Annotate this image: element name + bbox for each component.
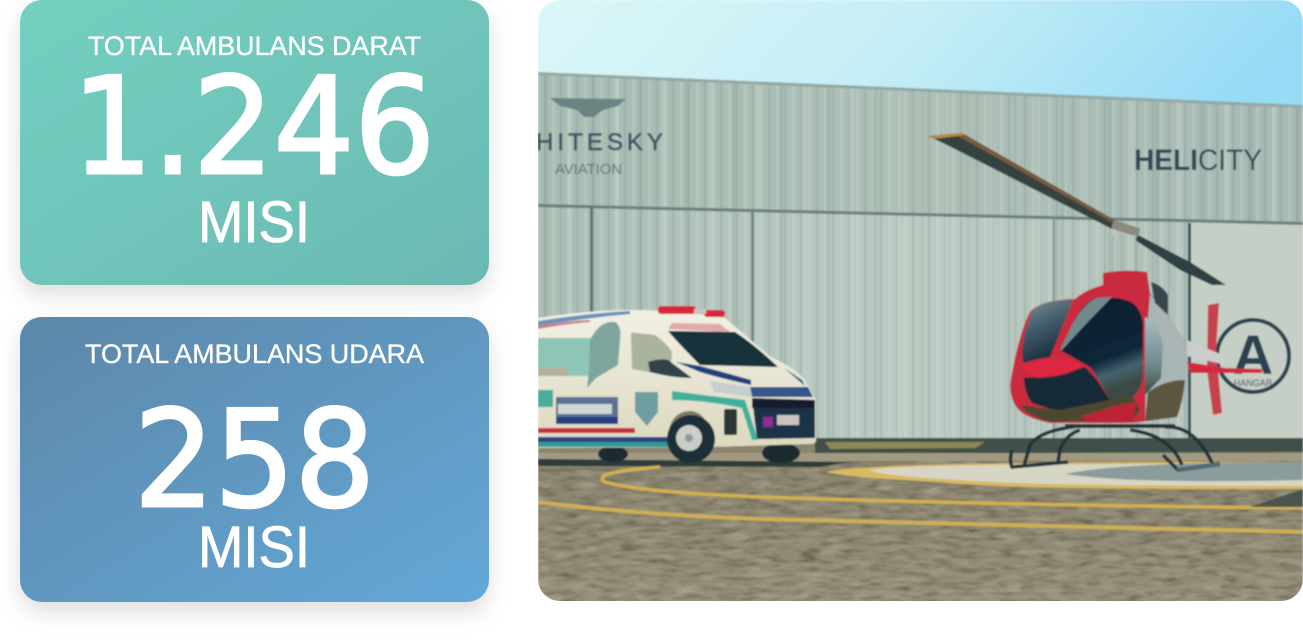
sign: whitesky aviation — [536, 98, 663, 178]
heading: total ambulans darat: TOTAL AMBULANS DARAT — [88, 31, 421, 61]
heading: total ambulans udara: TOTAL AMBULANS UDARA — [85, 339, 424, 369]
left window — [1022, 300, 1073, 363]
sign: whitesky aviation: HITESKY — [536, 129, 663, 156]
panel: total ambulans darat — [20, 0, 489, 285]
helicopter — [928, 133, 1262, 470]
number: 1.246: 1.246 — [72, 49, 435, 205]
sky — [538, 0, 1303, 106]
sign: a hangar: A — [1233, 323, 1273, 386]
number: 258: 258 — [134, 382, 375, 538]
label: misi: MISI — [198, 515, 310, 580]
skids — [1010, 426, 1220, 470]
red nose — [1022, 358, 1083, 378]
sign: a hangar: HANGAR — [1234, 378, 1273, 388]
ambulance — [538, 306, 816, 463]
rear silver body — [1145, 294, 1187, 421]
rotor blades — [928, 133, 1118, 229]
photo: ambulance and helicopter at hangar — [536, 0, 1303, 608]
sign: whitesky aviation: AVIATION — [555, 161, 622, 178]
sign: a hangar — [1217, 320, 1289, 392]
lower nose — [1024, 367, 1110, 412]
sign: helicity: HELICITY — [1134, 144, 1262, 177]
centre window — [1060, 298, 1143, 400]
label: misi: MISI — [198, 190, 310, 255]
ground — [538, 438, 1303, 608]
tail — [1207, 303, 1222, 415]
panel: total ambulans udara — [20, 317, 489, 602]
fuselage — [1010, 271, 1187, 423]
hangar wall — [538, 72, 1303, 440]
side window — [1145, 317, 1163, 395]
